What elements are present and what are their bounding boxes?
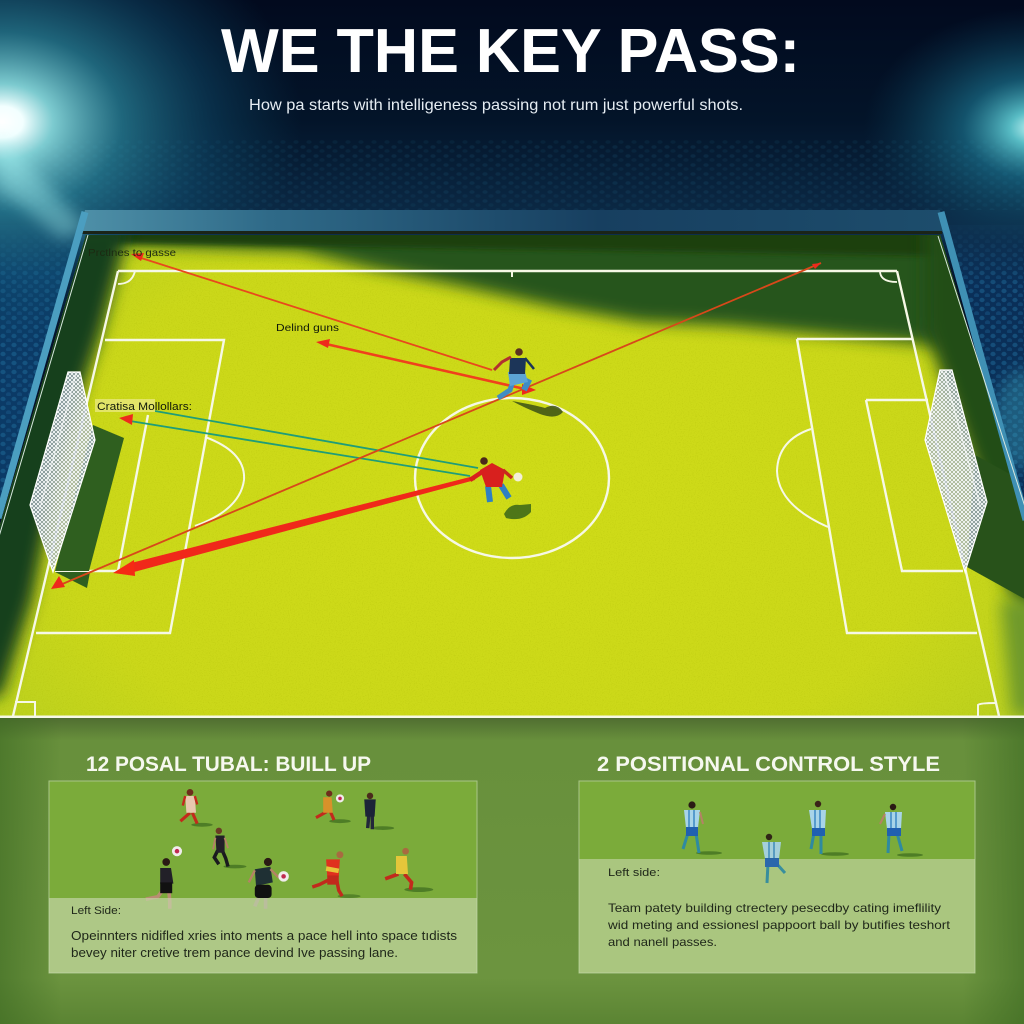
- text: description: Opeinnters nidifled xries into ments a pace hell into space tıdists: [71, 929, 457, 943]
- stadium background: [0, 0, 1024, 240]
- side stand: left: [0, 225, 90, 515]
- player: red and yellow with ball: [316, 790, 351, 823]
- caption overlay: [579, 859, 975, 973]
- player: blue four: [762, 834, 785, 883]
- subtitle: How pa starts with intelligeness passing not rum just powerful shots.: [249, 97, 743, 114]
- text: left side label: Left Side:: [71, 905, 121, 917]
- text: description: [607, 901, 951, 949]
- panel: positional control: [579, 781, 975, 973]
- pass arrow: long diagonal: [51, 263, 821, 589]
- annotation: middle: Delind guns: [276, 322, 339, 334]
- pitch shadows: [0, 225, 1024, 716]
- caption overlay: [49, 898, 477, 973]
- text: description: bevey niter cretive trem pance devind Ive passing lane.: [71, 946, 398, 960]
- lower section background: [0, 716, 1024, 1024]
- player: red forward: [312, 851, 361, 898]
- player: blue three: [880, 804, 923, 857]
- goal shadows: [55, 425, 1024, 602]
- player: blue on pitch: [494, 348, 563, 417]
- player: blue one: [683, 801, 722, 855]
- text: left side label: Left side:: [608, 867, 660, 879]
- teal passing lines: [119, 411, 478, 476]
- player: black centre: [213, 828, 246, 868]
- panel: build up: [49, 781, 477, 973]
- left goal net: [30, 372, 95, 572]
- player: black right with ball: [249, 858, 289, 909]
- player: black left with ball: [146, 846, 182, 909]
- heading: build up: 12 POSAL TUBAL: BUILL UP: [86, 753, 371, 776]
- text: description: Team patety building ctrectery pesecdby cating imeflility: [608, 901, 941, 915]
- text: description: wid meting and essionesl pappoort ball by butifies teshort: [607, 918, 951, 932]
- player: red and white: [180, 789, 213, 827]
- pass arrow: main through ball: [113, 476, 475, 576]
- floodlight glow: right: [780, 0, 1024, 320]
- text: description: [71, 929, 457, 960]
- pass arrow: long upper: [131, 253, 492, 370]
- side stand: right: [940, 225, 1024, 515]
- text: description: and nanell passes.: [608, 935, 717, 949]
- player: dark kit top: [364, 793, 394, 830]
- floodlight glow: left: [0, 0, 420, 360]
- player: yellow forward: [385, 848, 433, 892]
- pass arrow: defend run: [316, 339, 536, 395]
- stadium roof band: [79, 210, 946, 234]
- player: red on pitch: [470, 457, 531, 519]
- pitch: [0, 225, 1024, 716]
- annotation: creative: Cratisa Mollollars:: [97, 401, 192, 413]
- player: blue two: [809, 801, 849, 856]
- pitch markings: [13, 271, 999, 716]
- title: WE THE KEY PASS:: [221, 17, 800, 86]
- pitch edge rails: [0, 212, 1024, 540]
- heading: positional control: 2 POSITIONAL CONTROL STYLE: [597, 753, 940, 776]
- annotation: top: Prctlnes to gasse: [88, 247, 176, 259]
- right goal net: [925, 370, 987, 572]
